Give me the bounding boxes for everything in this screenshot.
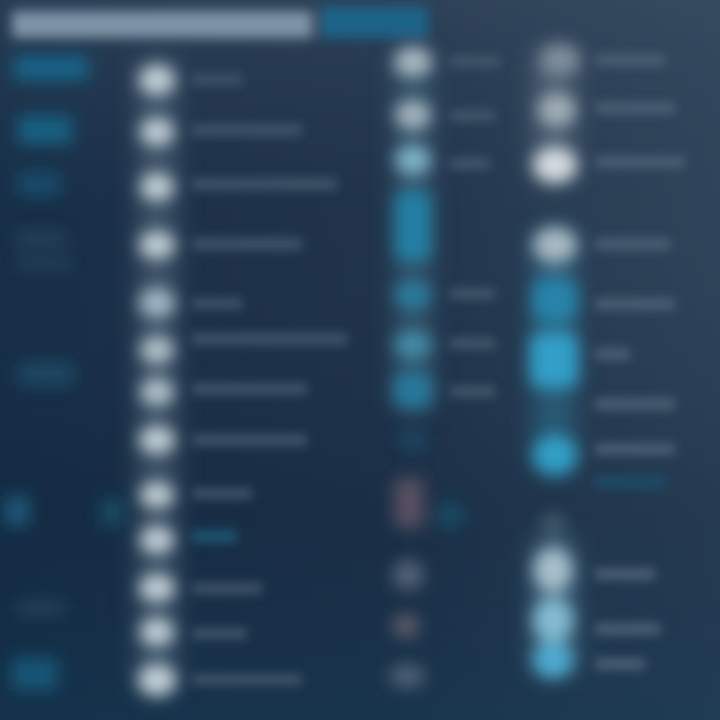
vertical bands behind marker columns: [140, 50, 572, 690]
column 3 text lines: [450, 56, 500, 397]
column 4 markers: [530, 44, 580, 678]
title bar: [12, 6, 428, 38]
column 4 text lines: [595, 54, 685, 670]
column 2 markers: [138, 65, 176, 696]
column 2 text lines: [192, 74, 347, 685]
left column labels: [4, 56, 124, 690]
column 3 markers: [389, 47, 464, 688]
